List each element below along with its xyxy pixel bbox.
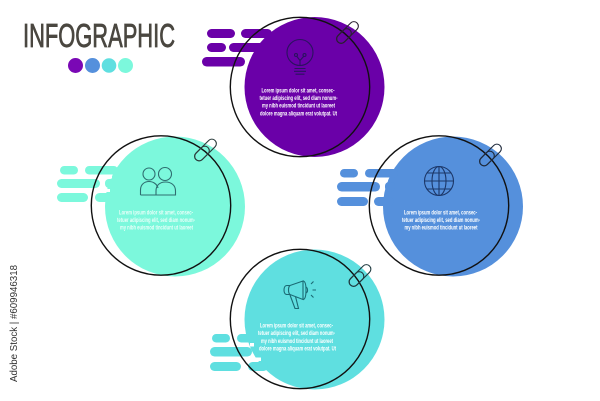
panel: blue globe: [337, 136, 523, 276]
blue text: Lorem ipsum dolor sit amet, consec-: [404, 210, 477, 216]
turquoise text: dolore magna aliquam erat volutpat. Ut: [259, 346, 337, 352]
turquoise text: my nibh euismod tincidunt ut laoreet: [261, 338, 334, 345]
turquoise text: tetuer adipiscing elit, sed diam nonum-: [258, 330, 335, 337]
icon: people: [140, 168, 176, 195]
stock id label: Adobe Stock | #609946318: [9, 265, 20, 382]
mint text: Lorem ipsum dolor sit amet, consec-: [119, 210, 193, 216]
mint disc: [105, 136, 245, 276]
purple text: [260, 88, 338, 118]
colour dots: [68, 58, 133, 73]
blue text: my nibh euismod tincidunt ut laoreet: [404, 224, 478, 232]
blue speed bars: [337, 169, 398, 206]
mint text: tetuer adipiscing elit, sed diam nonum-: [117, 217, 195, 224]
turquoise outline ring: [230, 249, 370, 389]
blue outline ring: [369, 136, 509, 275]
title: INFOGRAPHIC: [23, 17, 175, 54]
turquoise text: Lorem ipsum dolor sit amet, consec-: [260, 322, 333, 330]
mint outline ring: [91, 136, 231, 275]
purple outline ring: [230, 17, 370, 157]
icon: megaphone: [284, 281, 316, 308]
mint text: my nibh euismod tincidunt ut laoreet: [120, 224, 194, 232]
icon: globe: [424, 166, 454, 196]
purple text: my nibh euismod tincidunt ut laoreet: [262, 102, 336, 110]
blue text: tetuer adipiscing elit, sed diam nonum-: [402, 217, 480, 224]
purple text: Lorem ipsum dolor sit amet, consec-: [262, 88, 334, 94]
panel: mint team: [57, 136, 245, 276]
mint paper clip: [193, 137, 218, 163]
turquoise disc: [244, 250, 384, 390]
purple text: dolore magna aliquam erat volutpat. Ut: [260, 110, 338, 118]
blue disc: [383, 136, 523, 276]
purple speed bars: [202, 29, 272, 66]
blue text: [402, 210, 480, 232]
turquoise speed bars: [210, 334, 268, 371]
purple disc: [244, 17, 384, 157]
turquoise text: [258, 322, 337, 352]
turquoise paper clip: [347, 263, 373, 288]
blue paper clip: [478, 142, 503, 168]
mint speed bars: [57, 166, 118, 202]
icon: light bulb: [287, 40, 313, 74]
mint text: [117, 210, 195, 232]
panel: turquoise megaphone: [210, 249, 384, 390]
panel: purple idea: [202, 17, 384, 157]
purple paper clip: [335, 20, 360, 45]
purple text: tetuer adipiscing elit, sed diam nonum-: [260, 95, 338, 102]
